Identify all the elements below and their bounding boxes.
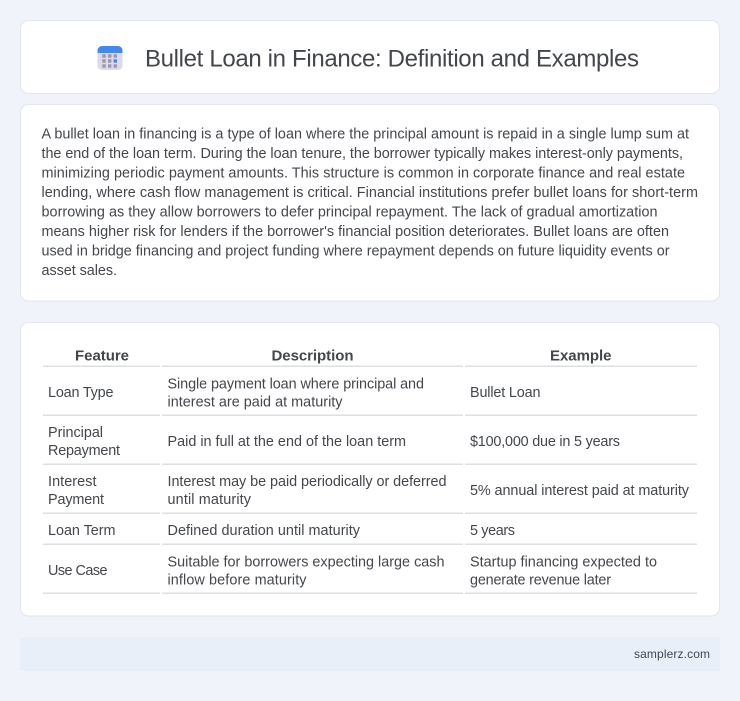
table row: principal repayment: Repayment: [48, 443, 120, 459]
text block: paragraph: used in bridge financing and project funding where repayment depends on future liquidity events or: [42, 244, 670, 260]
text block: paragraph: [42, 126, 698, 279]
text block: paragraph: the end of the loan term. During the loan tenure, the borrower typically makes interest-only payments,: [42, 146, 683, 162]
table row: principal repayment: Paid in full at the end of the loan term: [168, 434, 406, 450]
footer text: samplerz.com: [634, 647, 710, 661]
panel: description: [20, 104, 720, 301]
table row: use case: Use Case: [48, 563, 108, 579]
text block: paragraph: borrowing as they allow borrowers to defer principal repayment. The lack of gradual amortization: [42, 204, 658, 220]
table row: loan type: Loan Type: [48, 385, 114, 401]
table header row: [75, 348, 612, 364]
table row: principal repayment: [48, 425, 620, 459]
table row: interest payment: 5% annual interest paid at maturity: [470, 483, 690, 499]
table row: loan type: interest are paid at maturity: [168, 394, 343, 410]
table row: loan term: 5 years: [470, 523, 515, 539]
panel: feature table: [20, 322, 720, 616]
text block: paragraph: minimizing periodic payment amounts. This structure is common in corporate finance and real estate: [42, 166, 685, 182]
table row: loan type: Bullet Loan: [470, 385, 540, 401]
table row: principal repayment: $100,000 due in 5 years: [470, 434, 620, 450]
table row: use case: inflow before maturity: [168, 572, 307, 588]
panel: title header: [20, 20, 720, 94]
text block: paragraph: A bullet loan in financing is a type of loan where the principal amount is repaid in a single lump sum at: [42, 126, 689, 142]
table row: principal repayment: Principal: [48, 425, 103, 441]
table row: loan term: [48, 523, 515, 539]
table row: interest payment: until maturity: [168, 492, 252, 508]
table row: loan type: Single payment loan where principal and: [168, 376, 424, 392]
text block: paragraph: lending, where cash flow management is critical. Financial institutions prefer bullet loans for short-term: [42, 185, 698, 201]
table row: interest payment: Interest may be paid periodically or deferred: [168, 474, 446, 490]
title: Bullet Loan in Finance: Definition and Examples: [145, 46, 639, 72]
table row: use case: Suitable for borrowers expecting large cash: [168, 554, 444, 570]
table row: interest payment: Interest: [48, 474, 96, 490]
table header row: Feature: [75, 348, 129, 364]
table row: interest payment: Payment: [48, 492, 104, 508]
text block: paragraph: asset sales.: [42, 263, 117, 279]
table row: loan type: [48, 376, 540, 410]
footer bar: [20, 637, 720, 671]
table row: use case: Startup financing expected to: [470, 554, 657, 570]
table row: use case: generate revenue later: [470, 572, 611, 588]
table row: use case: [48, 554, 657, 588]
text block: paragraph: means higher risk for lenders if the borrower's financial position deteriorates. Bullet loans are often: [42, 224, 669, 240]
table header row: Description: [272, 348, 354, 364]
table header row: Example: [550, 348, 612, 364]
table row: loan term: Loan Term: [48, 523, 116, 539]
icon: calendar: [98, 46, 122, 70]
table row: loan term: Defined duration until maturity: [168, 523, 361, 539]
table row: interest payment: [48, 474, 690, 508]
